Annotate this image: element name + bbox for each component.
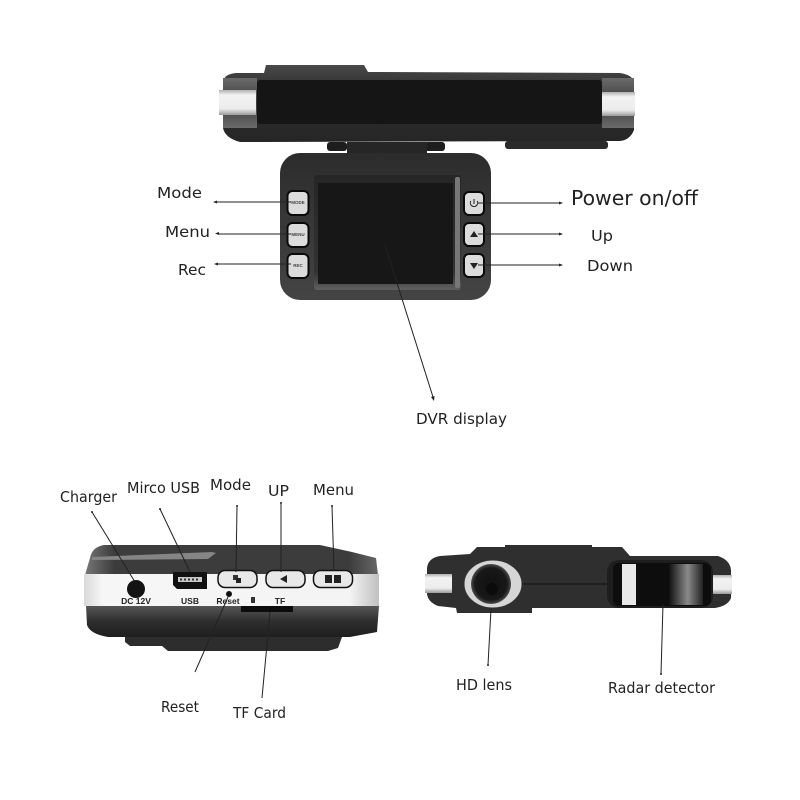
top shell — [85, 545, 378, 575]
leader: TF Card — [262, 612, 270, 698]
button: rec: REC — [293, 263, 303, 268]
right silver band — [711, 575, 732, 594]
base foot — [125, 637, 342, 651]
USB port — [173, 572, 207, 606]
arrow: power — [478, 202, 563, 204]
DVR LCD display — [318, 183, 453, 284]
lower body — [86, 606, 379, 637]
reset pinhole: Reset — [216, 596, 240, 606]
label: rear Mode: Mode — [210, 476, 251, 494]
button: mode: MODE — [291, 200, 305, 205]
arrow: mode — [213, 200, 291, 204]
left silver band — [219, 90, 256, 115]
mount neck — [327, 142, 445, 158]
device: front lens view — [425, 545, 732, 613]
label: DVR display: DVR display — [416, 410, 507, 428]
label: Power on/off: Power on/off — [571, 186, 699, 210]
button: mode — [288, 191, 308, 215]
front housing — [427, 545, 731, 613]
leader: Menu — [331, 505, 334, 571]
screen housing — [280, 153, 491, 300]
arrow: down — [478, 264, 563, 266]
device: rear ports view — [84, 545, 379, 651]
leader: Radar detector — [660, 604, 663, 675]
TF card slot — [241, 596, 293, 612]
button: menu: MENU — [291, 232, 305, 237]
leader: UP — [280, 502, 282, 572]
leader: HD lens — [487, 609, 491, 666]
label: Rec: Rec — [178, 261, 206, 279]
DC jack — [121, 580, 151, 606]
reset pinhole — [216, 591, 240, 606]
leader: Reset — [195, 597, 228, 672]
label: TF Card: TF Card — [232, 704, 286, 722]
label: Charger: Charger — [60, 488, 118, 506]
label: Radar detector: Radar detector — [608, 679, 716, 697]
label: Mode: Mode — [157, 184, 202, 202]
TF card slot: TF — [275, 596, 285, 606]
screen bezel — [314, 175, 461, 290]
right silver band — [602, 92, 635, 116]
housing seam — [520, 583, 610, 585]
button: rear mode — [218, 570, 257, 588]
label: rear Menu: Menu — [313, 481, 354, 499]
leader: Charger — [91, 511, 135, 582]
arrow: up — [478, 232, 563, 236]
USB port: USB — [181, 596, 199, 606]
radar display panel — [257, 80, 602, 124]
label: Menu: Menu — [165, 223, 210, 241]
top shell highlight — [92, 552, 216, 560]
label: HD lens: HD lens — [456, 676, 512, 694]
label: Up: Up — [591, 227, 613, 245]
DC jack: DC 12V — [121, 596, 151, 606]
bezel highlight — [455, 177, 460, 288]
button: rear up — [266, 570, 305, 588]
label: Down: Down — [587, 257, 633, 275]
button: up — [464, 223, 484, 246]
button: menu — [288, 223, 308, 247]
camera lens — [464, 560, 522, 608]
leader: Mode — [236, 505, 238, 572]
left silver band — [425, 574, 452, 593]
button: rear menu — [314, 570, 352, 588]
arrow: rec — [214, 262, 291, 266]
device: top view with screen — [219, 65, 635, 300]
label: Mirco USB: Mirco USB — [127, 479, 200, 497]
leader: Mirco USB — [159, 508, 190, 572]
button: rec — [288, 254, 308, 278]
label: Reset: Reset — [161, 698, 199, 716]
label: UP: UP — [268, 482, 289, 500]
radar detector window — [607, 560, 713, 608]
arrow: menu — [215, 232, 291, 235]
top housing — [223, 65, 634, 149]
silver band — [84, 574, 379, 606]
arrow: DVR display — [385, 245, 434, 401]
button: down — [464, 254, 484, 277]
button: power — [464, 192, 484, 215]
